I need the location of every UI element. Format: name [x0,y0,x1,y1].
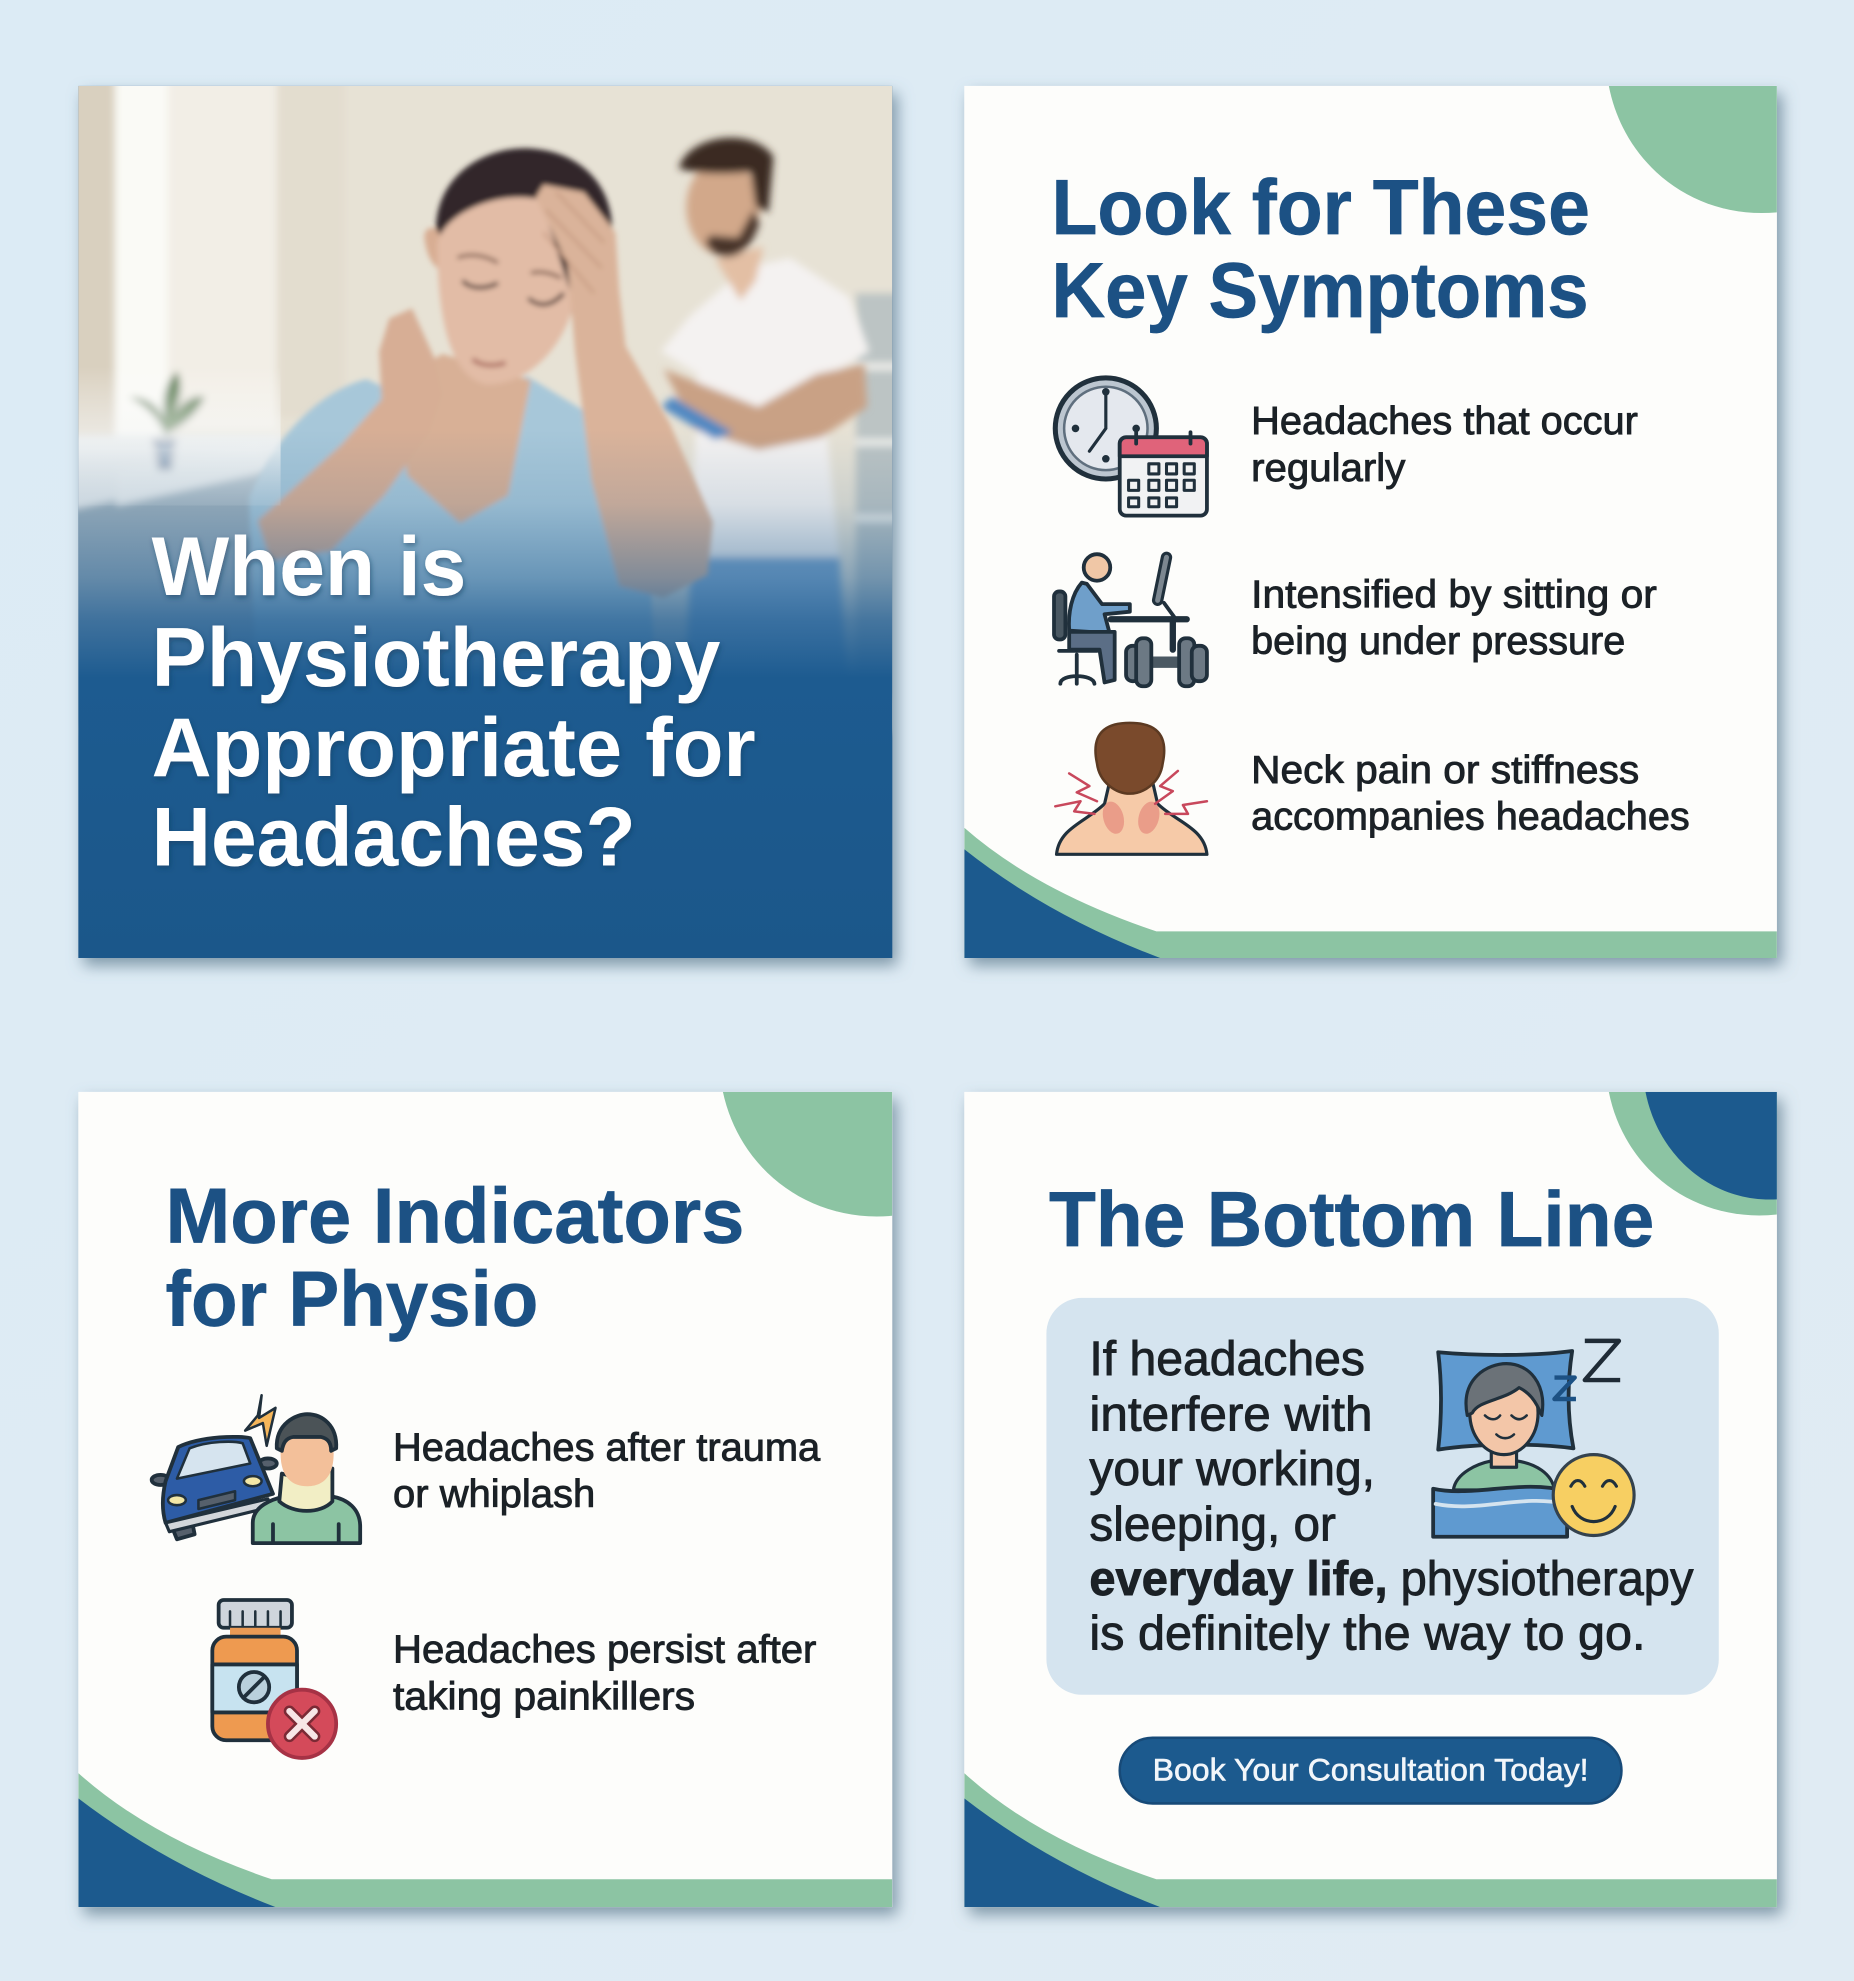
button: book consultation [1120,1738,1621,1803]
text: occurs regularly: regularly [1251,447,1406,490]
text: painkillers: Headaches persist after [393,1629,816,1672]
blue gradient overlay [78,430,892,958]
callout text: is definitely the way to go. [1089,1607,1645,1660]
callout text: If headaches [1089,1333,1365,1386]
icon: restful sleep [1433,1341,1634,1537]
text: intensified by sitting: Intensified by sitting or [1251,573,1657,616]
text: occurs regularly: Headaches that occur [1251,400,1638,443]
callout text [1089,1333,1693,1660]
callout box [1046,1298,1719,1695]
cover title: When is [152,519,466,613]
corner accent [1609,86,1777,213]
cover title: Physiotherapy [152,610,720,704]
photo: clinic room background [63,76,910,733]
photo: white wash at lower left [78,367,281,506]
icon: car crash and neck collar [152,1395,360,1543]
text: painkillers: taking painkillers [393,1675,695,1718]
heading [1051,163,1590,334]
callout text: everyday life, physiotherapy [1089,1553,1693,1606]
photo: therapist [660,131,872,656]
corner accent [723,1092,892,1216]
bottom swoosh [78,1773,892,1907]
callout text: interfere with [1089,1389,1372,1442]
bottom swoosh [964,1773,1777,1907]
heading [166,1171,744,1343]
text: painkillers [393,1629,816,1718]
icon: clock and calendar [1055,378,1207,516]
heading: The Bottom Line [1049,1175,1654,1263]
bottom swoosh [964,828,1777,958]
text: neck pain: accompanies headaches [1251,796,1690,839]
button: book consultation: Book Your Consultation Today! [1153,1752,1589,1788]
cover title [152,519,756,884]
icon: pill bottle with cross [212,1600,336,1758]
corner accent [1609,1092,1777,1215]
photo: woman holding her head and neck [248,144,716,640]
icon: desk worker and dumbbell [1054,554,1207,686]
text: trauma or whiplash [393,1426,820,1516]
panel: more indicators [78,1092,892,1907]
heading: Key Symptoms [1051,246,1589,334]
heading: for Physio [166,1255,538,1343]
callout text: sleeping, or [1089,1499,1336,1552]
heading: Look for These [1051,163,1590,251]
panel: the bottom line [964,1092,1777,1907]
text: intensified by sitting: being under pressure [1251,620,1625,663]
text: intensified by sitting [1251,573,1657,663]
icon: neck pain [1055,723,1207,854]
callout text: your working, [1089,1443,1375,1496]
text: neck pain [1251,749,1690,839]
text: neck pain: Neck pain or stiffness [1251,749,1639,792]
text: occurs regularly [1251,400,1638,490]
text: trauma or whiplash: Headaches after trauma [393,1426,820,1469]
cover title: Appropriate for [152,700,756,794]
heading: More Indicators [166,1171,744,1259]
cover title: Headaches? [152,790,636,884]
panel: photo cover [63,76,910,958]
panel: key symptoms [964,86,1777,958]
text: trauma or whiplash: or whiplash [393,1473,595,1516]
